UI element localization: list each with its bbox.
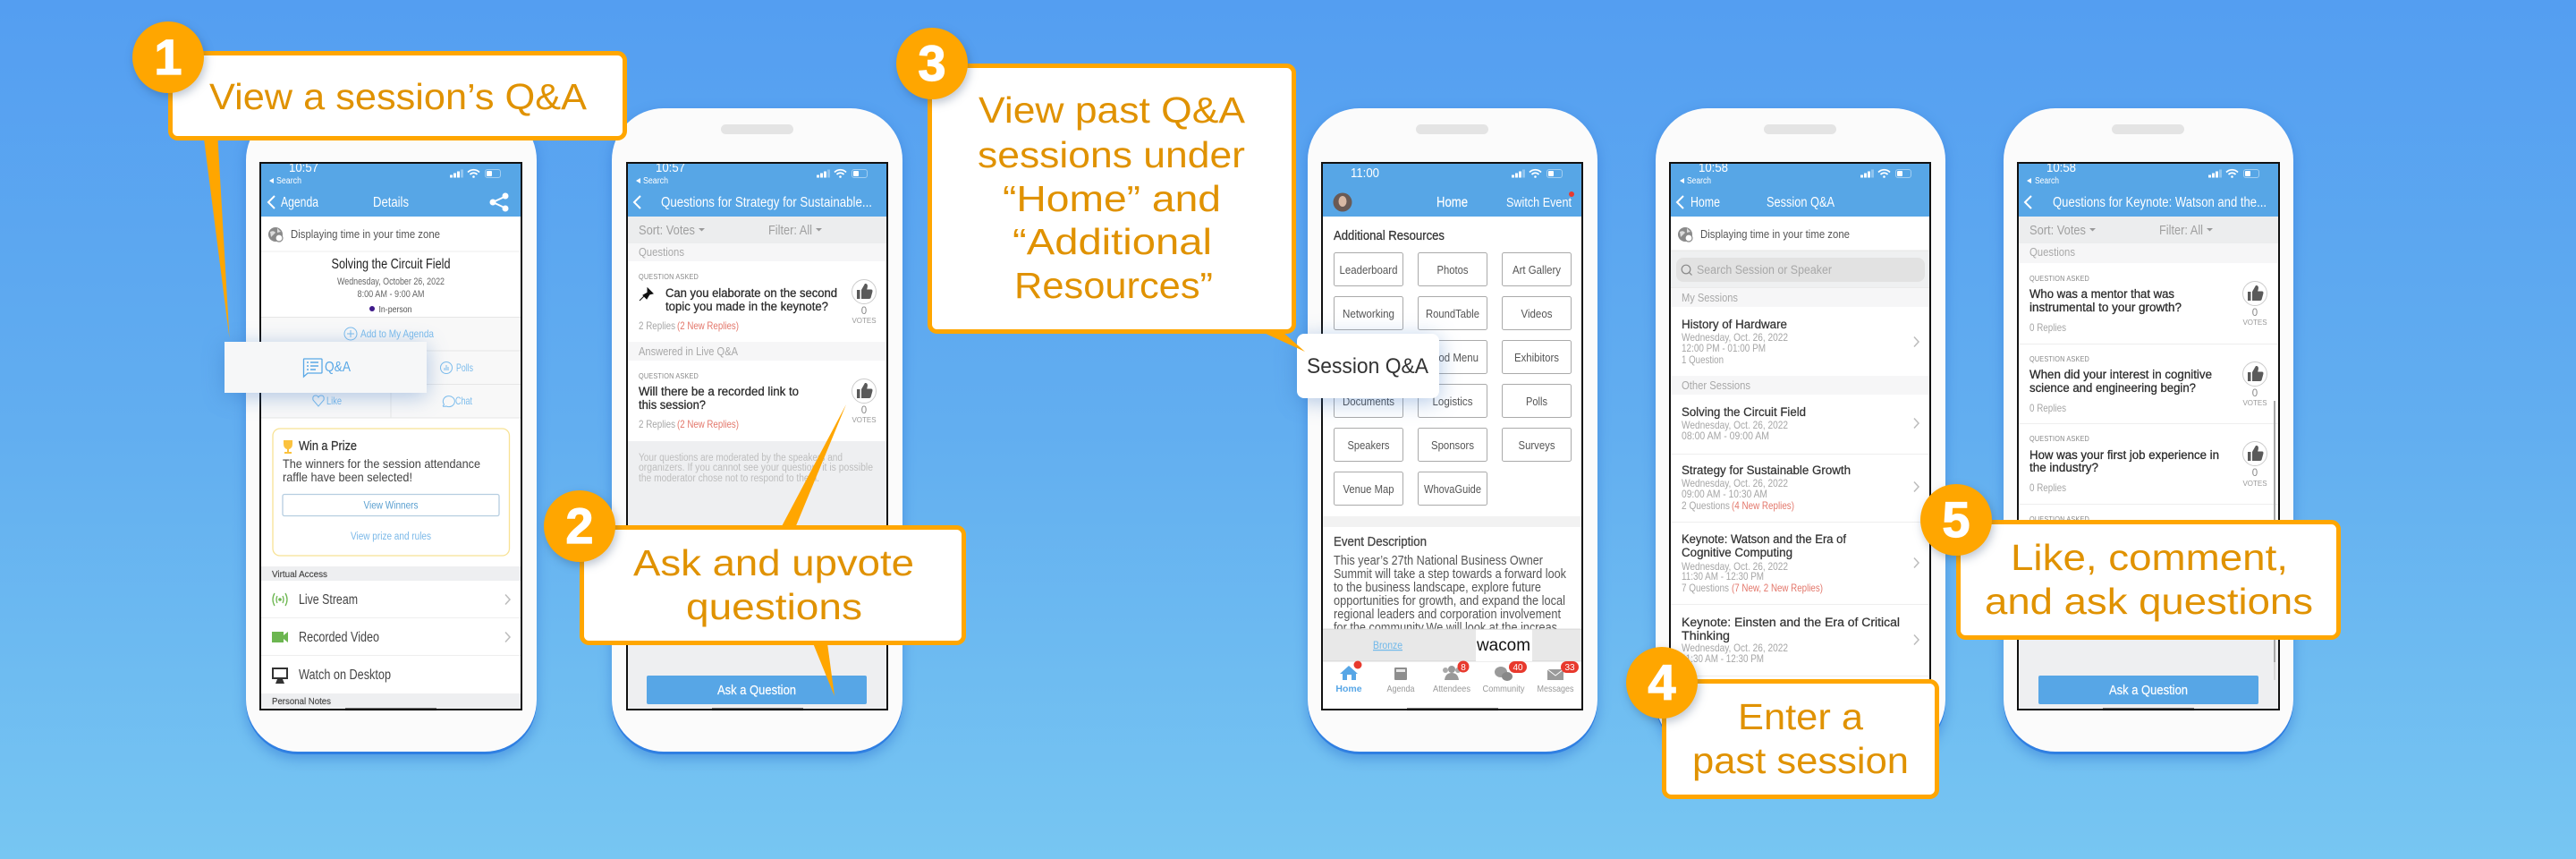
callout text [1985, 537, 2313, 622]
other sessions: Solving the Circuit Field [1682, 405, 1806, 420]
number badge 1: 1 [154, 29, 182, 85]
question 1: QUESTION ASKED [2029, 274, 2089, 283]
app header: 10:57 [289, 161, 318, 175]
additional resources: Polls [1526, 395, 1547, 408]
question 3: the industry? [2029, 461, 2098, 475]
other sessions: (7 New, 2 New Replies) [1732, 582, 1823, 594]
prize card: The winners for the session attendance [283, 456, 480, 471]
tab bar: 40 [1513, 663, 1523, 673]
additional resources: Leaderboard [1340, 263, 1397, 276]
tab bar: Agenda [1386, 684, 1415, 694]
other sessions: Wednesday, Oct. 26, 2022 [1682, 642, 1788, 654]
app header: 10:57 [656, 161, 685, 175]
action rows: Chat [455, 395, 472, 407]
app header: Search [643, 176, 668, 186]
question 3: 0 Replies [2029, 481, 2066, 494]
sort and filter [2018, 217, 2279, 263]
app header: 11:00 [1351, 166, 1379, 181]
question 2: VOTES [2242, 399, 2267, 407]
moderation note [627, 441, 887, 709]
action rows [261, 317, 521, 419]
other sessions: Keynote: Einsten and the Era of Critical [1682, 616, 1900, 630]
additional resources: Art Gallery [1513, 263, 1561, 276]
question: answered: Will there be a recorded link to [639, 385, 799, 399]
callout text: past session [1692, 740, 1909, 781]
event description: for the community.We will look at the increas [1334, 621, 1557, 635]
sort and filter: Sort: Votes [2029, 223, 2086, 238]
question 2: 0 Replies [2029, 402, 2066, 414]
callout text: “Additional [1013, 221, 1212, 262]
number badge 5 [1920, 484, 1992, 556]
app header [627, 161, 887, 217]
question: answered: this session? [639, 398, 706, 412]
other sessions: Wednesday, Oct. 26, 2022 [1682, 477, 1788, 489]
app header: Home [1436, 195, 1468, 210]
tab bar: Messages [1537, 684, 1574, 694]
additional resources: Food Menu [1427, 351, 1479, 364]
question: pinned: Questions [639, 245, 684, 259]
callout 2 [544, 404, 964, 696]
callout 1 [132, 21, 624, 338]
tab bar: 33 [1564, 663, 1575, 673]
session info: 8:00 AM - 9:00 AM [358, 289, 424, 300]
screen content [1322, 164, 1582, 709]
additional resources: WhovaGuide [1424, 482, 1481, 496]
virtual access list: Recorded Video [299, 630, 379, 645]
virtual access list: Watch on Desktop [299, 668, 391, 683]
other sessions: Other Sessions [1682, 378, 1750, 392]
other sessions: 11:30 AM - 12:30 PM [1682, 652, 1764, 665]
question 1 [2018, 274, 2279, 344]
virtual access list: Personal Notes [272, 696, 331, 707]
tab bar [1335, 660, 1579, 694]
other sessions: 08:00 AM - 09:00 AM [1682, 430, 1769, 442]
moderation note: organizers. If you cannot see your question, it is possible [639, 463, 873, 473]
speaker [721, 124, 793, 134]
app header: Search [276, 176, 301, 186]
additional resources: Photos [1436, 263, 1469, 276]
question 3: How was your first job experience in [2029, 448, 2219, 463]
callout box [930, 66, 1293, 331]
tile: Q&A button highlight: Q&A [325, 360, 352, 375]
action rows: Add to My Agenda [360, 327, 434, 340]
question: answered: VOTES [852, 416, 877, 424]
question 2 [2018, 354, 2279, 424]
prize card: View prize and rules [351, 532, 431, 542]
additional resources: Speakers [1347, 438, 1390, 452]
other sessions: 7 Questions [1682, 582, 1729, 594]
question: pinned: QUESTION ASKED [639, 272, 699, 281]
app header [1670, 161, 1930, 217]
lower area and ask button [2018, 401, 2279, 709]
my sessions: History of Hardware [1682, 318, 1787, 332]
question: answered: Answered in Live Q&A [639, 344, 738, 358]
my sessions: 1 Question [1682, 353, 1724, 366]
additional resources: Venue Map [1343, 482, 1394, 496]
prize card: Win a Prize [299, 438, 357, 454]
sort and filter: Sort: Votes [639, 223, 695, 238]
app header: Agenda [281, 195, 318, 210]
phone body [246, 108, 537, 752]
question: pinned: 2 Replies [639, 319, 675, 332]
callout box [581, 528, 964, 642]
arrow: to votes [781, 404, 846, 528]
app header [1322, 164, 1582, 217]
tile: Q&A button highlight [225, 342, 427, 393]
tab bar: Home [1335, 684, 1362, 694]
callout text [978, 89, 1246, 306]
my sessions [1670, 288, 1930, 366]
ask button: Ask a Question [717, 684, 796, 698]
phone body [2004, 108, 2293, 752]
screen content [627, 161, 887, 709]
question: answered [627, 342, 887, 430]
callout text: Like, comment, [2011, 537, 2288, 578]
question: pinned: VOTES [852, 317, 877, 325]
additional resources: Networking [1343, 307, 1394, 320]
question 3: VOTES [2242, 480, 2267, 488]
callout text: and ask questions [1985, 581, 2313, 622]
event description: Summit will take a step towards a forward look [1334, 567, 1567, 582]
question: answered: QUESTION ASKED [639, 371, 699, 380]
session info: In-person [379, 304, 412, 315]
question: answered: 2 Replies [639, 418, 675, 430]
tab bar: 8 [1461, 663, 1466, 673]
additional resources: Additional Resources [1334, 229, 1445, 243]
lower area and ask button: Ask a Question [2109, 684, 2188, 698]
question 1: 0 [2252, 308, 2258, 319]
tile: Session Q&A highlight: Session Q&A [1307, 354, 1428, 378]
screen content [2018, 161, 2279, 709]
other sessions: Thinking [1682, 629, 1730, 643]
question 2: 0 [2252, 388, 2258, 399]
question: pinned: 0 [861, 306, 867, 317]
time zone row: Displaying time in your time zone [291, 228, 440, 241]
other sessions: (4 New Replies) [1732, 499, 1794, 512]
app header: Switch Event [1506, 196, 1572, 210]
question 2: When did your interest in cognitive [2029, 368, 2212, 382]
app header: Session Q&A [1767, 195, 1835, 210]
time zone and search: Displaying time in your time zone [1700, 228, 1850, 241]
arrow: to ask button [813, 643, 835, 696]
speaker [1416, 124, 1488, 134]
callout box [1959, 523, 2338, 637]
number badge 1 [132, 21, 204, 93]
sort and filter: Filter: All [2159, 223, 2203, 238]
callout text: Enter a [1738, 696, 1863, 737]
question 1: 0 Replies [2029, 321, 2066, 334]
action rows: Like [326, 395, 342, 407]
question 1: VOTES [2242, 319, 2267, 327]
app header: Questions for Keynote: Watson and the... [2053, 195, 2267, 210]
callout box [1664, 682, 1937, 796]
tab bar: Community [1483, 684, 1525, 694]
additional resources: Documents [1343, 395, 1394, 408]
other sessions [1670, 376, 1930, 676]
screen content [261, 161, 521, 709]
question: pinned: Can you elaborate on the second [665, 286, 837, 301]
action rows: Polls [456, 361, 473, 374]
event description [1322, 516, 1582, 635]
app header: Questions for Strategy for Sustainable... [661, 195, 872, 210]
virtual access list: Live Stream [299, 592, 358, 608]
number badge 3 [896, 28, 968, 99]
question: pinned: (2 New Replies) [677, 319, 739, 332]
tab bar: Attendees [1433, 684, 1470, 694]
app header [2018, 161, 2279, 217]
arrow: to Q&A [204, 139, 229, 338]
screen content [1670, 161, 1930, 709]
sort and filter [627, 217, 887, 243]
question 2: QUESTION ASKED [2029, 354, 2089, 363]
callout text: View a session’s Q&A [209, 76, 588, 117]
screen frame [627, 163, 887, 710]
phone 2: questions list [612, 108, 902, 752]
other sessions: Wednesday, Oct. 26, 2022 [1682, 419, 1788, 431]
phone body [1308, 108, 1597, 752]
session info: Wednesday, October 26, 2022 [337, 276, 445, 287]
screen frame [260, 163, 521, 710]
phone 5: questions for keynote [2004, 108, 2293, 752]
virtual access list [261, 566, 521, 709]
event description: to the business landscape, explore future [1334, 581, 1541, 595]
phone 4: session list [1656, 108, 1945, 752]
arrow: to Session Q&A [1262, 332, 1305, 352]
prize card [273, 429, 510, 556]
question 3: 0 [2252, 468, 2258, 479]
app header: Search [1687, 176, 1711, 186]
moderation note: Your questions are moderated by the speakers and [639, 453, 843, 464]
my sessions: My Sessions [1682, 291, 1738, 304]
sponsor banner: wacom [1476, 636, 1530, 655]
phone 1: session details [246, 108, 537, 752]
prize card: raffle have been selected! [283, 470, 412, 484]
callout text: Ask and upvote [633, 542, 914, 583]
sort and filter: Questions [2029, 245, 2075, 259]
other sessions: Keynote: Watson and the Era of [1682, 532, 1846, 547]
question 2: science and engineering begin? [2029, 381, 2196, 395]
callout text [633, 542, 914, 627]
app header [261, 161, 521, 217]
app header: Details [373, 195, 409, 210]
question: pinned: topic you made in the keynote? [665, 300, 828, 314]
my sessions: 12:00 PM - 01:00 PM [1682, 342, 1766, 354]
callout text: “Home” and [1003, 178, 1221, 219]
virtual access list: Virtual Access [272, 569, 327, 580]
sort and filter: Filter: All [768, 223, 812, 238]
phone body [612, 108, 902, 752]
number badge 2: 2 [565, 498, 594, 554]
question 3: QUESTION ASKED [2029, 515, 2089, 523]
callout 4 [1626, 647, 1937, 796]
prize card: View Winners [363, 501, 419, 512]
question: pinned [627, 243, 887, 332]
app header: 10:58 [1699, 161, 1728, 175]
time zone and search: Search Session or Speaker [1697, 263, 1832, 276]
phone 3: home [1308, 108, 1597, 752]
number badge 2 [544, 490, 615, 562]
speaker [355, 124, 428, 134]
callout text [1692, 696, 1909, 781]
event description: opportunities for growth, and expand the local [1334, 594, 1565, 608]
session info [331, 257, 451, 315]
event description: regional leaders and corporation involvement [1334, 608, 1561, 622]
callout text: View past Q&A [979, 89, 1246, 131]
callout text: Resources” [1014, 265, 1213, 306]
additional resources: Sponsors [1431, 438, 1474, 452]
event description: This year’s 27th National Business Owner [1334, 554, 1543, 568]
other sessions: Wednesday, Oct. 26, 2022 [1682, 560, 1788, 573]
speaker [2112, 124, 2184, 134]
app header: 10:58 [2046, 161, 2076, 175]
time zone and search [1670, 227, 1930, 288]
callout text: sessions under [978, 134, 1245, 175]
my sessions: Wednesday, Oct. 26, 2022 [1682, 331, 1788, 344]
tile: Session Q&A highlight [1297, 334, 1439, 398]
event description: Event Description [1334, 535, 1427, 549]
number badge 5: 5 [1942, 491, 1970, 548]
other sessions: 09:00 AM - 10:30 AM [1682, 488, 1767, 500]
additional resources: RoundTable [1426, 307, 1479, 320]
phone body [1656, 108, 1945, 752]
other sessions: Cognitive Computing [1682, 546, 1792, 560]
question 3 [2018, 434, 2279, 523]
screen frame [2018, 163, 2279, 710]
question: answered: 0 [861, 405, 867, 416]
additional resources: Logistics [1433, 395, 1473, 408]
additional resources: Surveys [1519, 438, 1555, 452]
time zone row [261, 227, 521, 252]
moderation note: the moderator chose not to respond to them. [639, 473, 819, 484]
callout text: questions [686, 586, 862, 627]
speaker [1764, 124, 1836, 134]
callout 3 [896, 28, 1305, 352]
question 1: instrumental to your growth? [2029, 301, 2182, 315]
number badge 3: 3 [918, 35, 946, 91]
question 1: Who was a mentor that was [2029, 287, 2174, 302]
app header: Home [1690, 195, 1720, 210]
screen frame [1322, 163, 1582, 710]
other sessions: 2 Questions [1682, 499, 1730, 512]
app header: Search [2035, 176, 2059, 186]
ask button [647, 676, 867, 704]
additional resources: Videos [1521, 307, 1553, 320]
other sessions: Strategy for Sustainable Growth [1682, 464, 1851, 478]
callout 5 [1920, 484, 2338, 637]
sponsor banner [1322, 629, 1582, 661]
screen frame [1670, 163, 1930, 710]
additional resources: Exhibitors [1514, 351, 1559, 364]
callout box [170, 54, 624, 138]
number badge 4: 4 [1648, 654, 1676, 710]
question: answered: (2 New Replies) [677, 418, 739, 430]
question 3: QUESTION ASKED [2029, 434, 2089, 443]
number badge 4 [1626, 647, 1698, 719]
other sessions: 11:30 AM - 12:30 PM [1682, 570, 1764, 583]
additional resources [1334, 229, 1571, 505]
session info: Solving the Circuit Field [331, 257, 451, 272]
sponsor banner: Bronze [1373, 639, 1402, 651]
